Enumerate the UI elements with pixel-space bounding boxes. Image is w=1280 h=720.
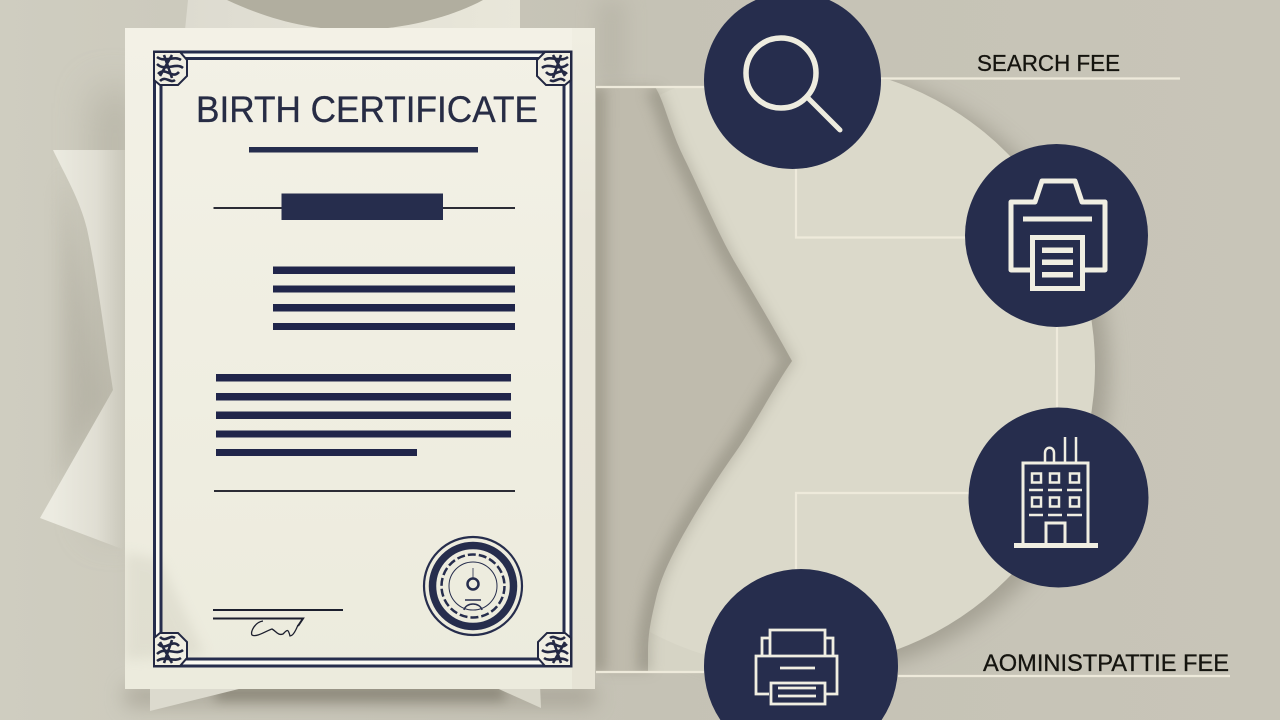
corner ornament: bottom right bbox=[538, 633, 571, 666]
certificate panel bbox=[125, 28, 595, 689]
certificate double border bbox=[154, 52, 571, 666]
signature bbox=[213, 610, 343, 636]
title underline bbox=[249, 147, 478, 152]
paper fragment: bottom bbox=[150, 685, 541, 711]
panel: pale curved backdrop bbox=[648, 80, 1116, 671]
certificate title: BIRTH CERTIFICATE bbox=[196, 89, 538, 130]
icon: building circle bbox=[968, 408, 1148, 588]
seal bbox=[424, 537, 522, 635]
divider line bbox=[214, 490, 515, 492]
paper fragment: left bbox=[40, 150, 130, 552]
folded paper shape bbox=[590, 87, 796, 672]
name field bbox=[214, 194, 515, 220]
icon: copy printer circle bbox=[965, 144, 1148, 327]
corner ornament: bottom left bbox=[154, 633, 187, 666]
icon: search fee circle bbox=[704, 0, 881, 169]
label: administrative fee: AOMINISTPATTIE FEE bbox=[983, 650, 1229, 677]
paper fragment: top bbox=[185, 0, 520, 30]
icon: printer circle bbox=[704, 569, 898, 720]
background shadow behind certificate bbox=[62, 0, 626, 706]
label: search fee: SEARCH FEE bbox=[977, 50, 1120, 76]
connector lines bbox=[596, 78, 1230, 676]
text block: upper lines bbox=[273, 266, 515, 330]
certificate sheet bbox=[125, 28, 595, 689]
corner ornament: top left bbox=[154, 52, 187, 85]
corner ornament: top right bbox=[537, 52, 571, 85]
text block: lower lines bbox=[216, 374, 511, 456]
